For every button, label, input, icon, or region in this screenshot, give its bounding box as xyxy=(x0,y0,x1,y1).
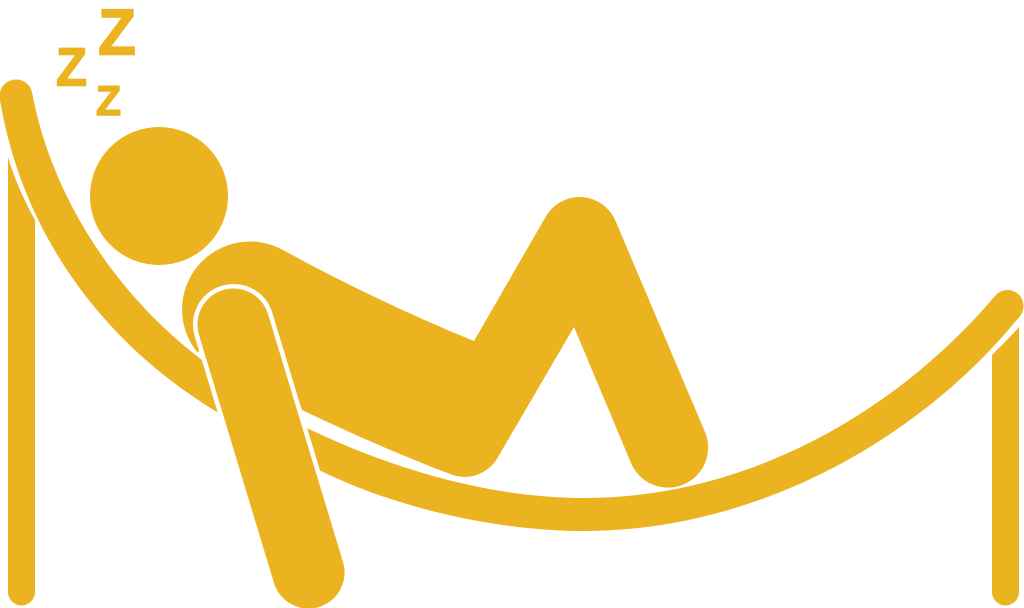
icon: left post xyxy=(8,157,35,606)
text: small Z: Z xyxy=(96,77,121,124)
icon: hammock xyxy=(0,80,1024,531)
icon: right post xyxy=(992,327,1019,606)
icon: torso and leg xyxy=(182,197,708,488)
icon: head xyxy=(90,127,228,265)
icon: arm xyxy=(197,288,345,608)
text: medium Z: Z xyxy=(56,38,87,97)
